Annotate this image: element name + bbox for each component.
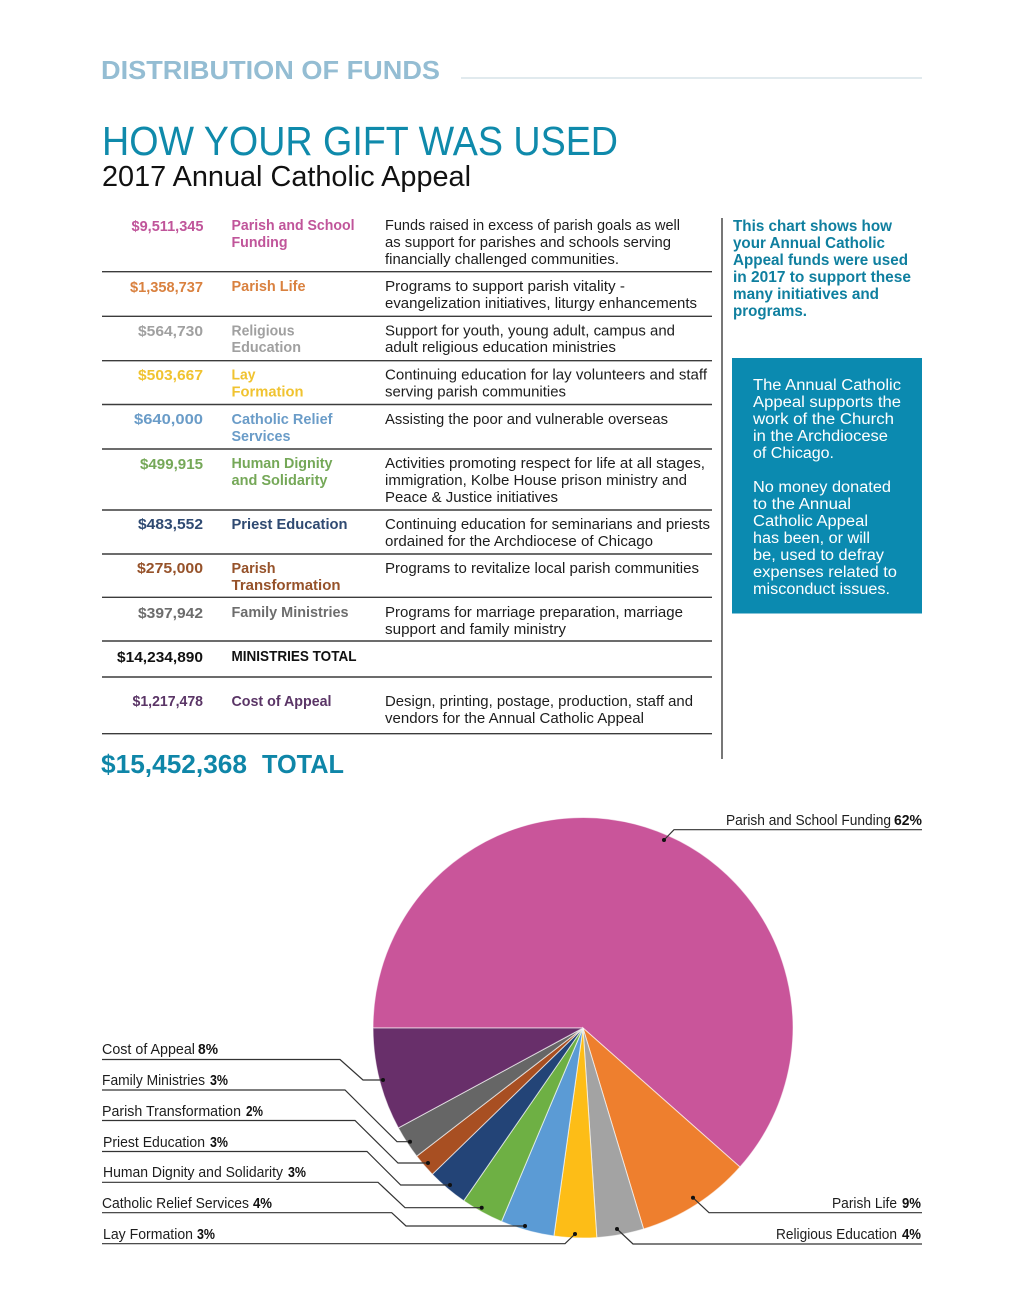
row: Religious Education: adult religious education ministries (385, 339, 616, 356)
row: Catholic Relief Services: Assisting the poor and vulnerable overseas (385, 411, 668, 428)
row: Parish and School Funding: Parish and School (232, 217, 354, 234)
row: Parish Transformation: Programs to revitalize local parish communities (385, 560, 699, 577)
row: Human Dignity and Solidarity: and Solidarity (232, 472, 328, 489)
callout: Priest Education 3%: Priest Education (103, 1135, 205, 1151)
slice: Human Dignity and Solidarity 3% (464, 1028, 583, 1222)
callout: Parish and School Funding 62%: 62% (894, 813, 922, 829)
callout: Religious Education 4% (615, 1227, 922, 1244)
callout panel: No money donated (753, 479, 891, 496)
row: Lay Formation (138, 366, 708, 400)
row: Parish Life: $1,358,737 (130, 280, 203, 296)
row: Family Ministries: Family Ministries (232, 604, 348, 621)
callout: Catholic Relief Services 4%: Catholic Relief Services (102, 1196, 249, 1212)
section heading: distribution of funds: DISTRIBUTION OF FUNDS (101, 55, 440, 85)
grand total (101, 749, 344, 779)
row: Human Dignity and Solidarity: immigration, Kolbe House prison ministry and (385, 472, 687, 489)
callout: Religious Education 4%: Religious Education (776, 1227, 897, 1243)
callout panel: of Chicago. (753, 445, 834, 462)
callout: Human Dignity and Solidarity 3%: Human Dignity and Solidarity (103, 1165, 284, 1181)
callout: Lay Formation 3%: Lay Formation (103, 1227, 193, 1243)
row: Ministries Total: $14,234,890 (117, 650, 203, 666)
row: Human Dignity and Solidarity: $499,915 (140, 457, 203, 473)
row: Human Dignity and Solidarity: Human Dignity (232, 455, 333, 472)
row: Parish Transformation: $275,000 (137, 561, 203, 577)
row: Parish Life: evangelization initiatives, liturgy enhancements (385, 295, 697, 312)
row: Family Ministries: $397,942 (138, 606, 203, 622)
callout: Family Ministries 3%: Family Ministries (102, 1073, 205, 1089)
callout: Priest Education 3%: 3% (210, 1135, 228, 1151)
row: Priest Education: $483,552 (138, 517, 203, 533)
callout: Human Dignity and Solidarity 3% (102, 1165, 484, 1210)
callout panel: The Annual Catholic (753, 377, 901, 394)
callout: Family Ministries 3%: 3% (210, 1073, 228, 1089)
side note: Appeal funds were used (733, 252, 908, 269)
callout panel: expenses related to (753, 564, 897, 581)
row: Parish Transformation: Parish (232, 560, 276, 577)
row: Cost of Appeal: Design, printing, postage, production, staff and (385, 693, 693, 710)
callout: Lay Formation 3%: 3% (197, 1227, 215, 1243)
row: Lay Formation: serving parish communities (385, 384, 566, 400)
row: Cost of Appeal: $1,217,478 (132, 694, 203, 710)
side note: your Annual Catholic (733, 235, 885, 252)
side note (733, 218, 911, 320)
row: Parish Life (130, 278, 697, 312)
funds table (102, 217, 712, 734)
row: Cost of Appeal (132, 693, 693, 727)
side note: many initiatives and (733, 286, 879, 303)
row: Human Dignity and Solidarity: Activities promoting respect for life at all stages, (385, 455, 705, 472)
row: Priest Education: ordained for the Archdiocese of Chicago (385, 533, 653, 550)
callout panel: be, used to defray (753, 547, 884, 564)
row: Ministries Total: MINISTRIES TOTAL (232, 648, 356, 665)
row: Ministries Total (117, 648, 356, 666)
slice: Religious Education 4% (583, 1028, 644, 1238)
callout: Catholic Relief Services 4%: 4% (253, 1196, 272, 1212)
callout: Family Ministries 3% (102, 1073, 412, 1144)
row: Religious Education: Support for youth, young adult, campus and (385, 322, 675, 340)
callout panel: Appeal supports the (753, 394, 901, 411)
slice: Lay Formation 3% (554, 1028, 597, 1238)
row: Parish and School Funding: Funds raised in excess of parish goals as well (385, 217, 680, 234)
row: Religious Education: $564,730 (138, 324, 203, 340)
callout: Lay Formation 3% (102, 1227, 577, 1244)
subtitle: 2017 Annual Catholic Appeal (102, 161, 471, 193)
row: Family Ministries (138, 604, 683, 638)
row: Parish and School Funding: $9,511,345 (132, 219, 204, 235)
callout: Parish Life 9% (691, 1196, 922, 1213)
callout: Cost of Appeal 8%: Cost of Appeal (102, 1042, 195, 1058)
row: Parish Life: Parish Life (232, 278, 306, 295)
callout: Parish Transformation 2%: 2% (246, 1104, 263, 1120)
callout: Catholic Relief Services 4% (102, 1196, 527, 1228)
row: Lay Formation: Lay (232, 366, 256, 384)
callout panel: Catholic Appeal (753, 513, 868, 530)
callout panel: in the Archdiocese (753, 428, 888, 445)
callout: Parish Transformation 2%: Parish Transformation (102, 1104, 241, 1120)
callout panel: has been, or will (753, 530, 870, 547)
slice: Family Ministries 3% (398, 1028, 583, 1156)
row: Human Dignity and Solidarity: Peace & Justice initiatives (385, 489, 558, 506)
callout: Parish Transformation 2% (102, 1104, 430, 1165)
title: HOW YOUR GIFT WAS USED (102, 118, 618, 164)
callout: Parish Life 9%: 9% (902, 1196, 921, 1212)
row: Parish and School Funding: Funding (232, 234, 288, 251)
slice: Parish Transformation 2% (417, 1028, 583, 1174)
callout: Cost of Appeal 8% (102, 1042, 385, 1082)
row: Catholic Relief Services: Services (232, 428, 290, 445)
callout: Priest Education 3% (102, 1135, 452, 1187)
row: Lay Formation: Formation (232, 384, 304, 400)
row: Family Ministries: Programs for marriage preparation, marriage (385, 604, 683, 621)
callout: Human Dignity and Solidarity 3%: 3% (288, 1165, 306, 1181)
row: Catholic Relief Services: $640,000 (134, 412, 203, 428)
callout: Cost of Appeal 8%: 8% (198, 1042, 218, 1058)
row: Religious Education: Religious (232, 322, 294, 340)
row: Catholic Relief Services (134, 411, 668, 445)
callout: Parish and School Funding 62% (662, 813, 922, 842)
row: Parish Life: Programs to support parish vitality - (385, 278, 625, 295)
slice: Parish Life 9% (583, 1028, 740, 1229)
slice: Priest Education 3% (432, 1028, 583, 1201)
row: Priest Education: Continuing education for seminarians and priests (385, 516, 710, 533)
callout: Religious Education 4%: 4% (902, 1227, 921, 1243)
side note: This chart shows how (733, 218, 893, 235)
row: Parish and School Funding: financially challenged communities. (385, 251, 619, 268)
row: Parish and School Funding: as support for parishes and schools serving (385, 234, 671, 251)
row: Cost of Appeal: Cost of Appeal (232, 693, 332, 710)
side note: in 2017 to support these (733, 269, 911, 286)
pie chart (373, 818, 793, 1238)
callout panel: to the Annual (753, 496, 851, 513)
row: Priest Education (138, 516, 710, 550)
row: Priest Education: Priest Education (232, 516, 348, 533)
row: Human Dignity and Solidarity (140, 455, 705, 506)
row: Lay Formation: $503,667 (138, 368, 203, 384)
row: Parish Transformation: Transformation (232, 577, 340, 594)
grand total: $15,452,368 (101, 749, 247, 779)
slice: Parish and School Funding 62% (373, 818, 793, 1167)
row: Family Ministries: support and family ministry (385, 621, 566, 638)
row: Parish and School Funding (132, 217, 680, 268)
row: Parish Transformation (137, 560, 699, 594)
side note: programs. (733, 303, 807, 320)
callout panel: work of the Church (752, 411, 894, 428)
callout: Parish and School Funding 62%: Parish and School Funding (726, 813, 891, 829)
callout panel (732, 358, 922, 614)
row: Lay Formation: Continuing education for lay volunteers and staff (385, 366, 708, 384)
callout panel: misconduct issues. (753, 581, 890, 598)
row: Religious Education (138, 322, 675, 356)
row: Cost of Appeal: vendors for the Annual Catholic Appeal (385, 710, 644, 727)
grand total: TOTAL (262, 749, 344, 779)
slice: Cost of Appeal 8% (373, 1028, 583, 1128)
row: Religious Education: Education (232, 339, 301, 356)
callout: Parish Life 9%: Parish Life (832, 1196, 897, 1212)
slice: Catholic Relief Services 4% (502, 1028, 583, 1236)
row: Catholic Relief Services: Catholic Relief (232, 411, 333, 428)
